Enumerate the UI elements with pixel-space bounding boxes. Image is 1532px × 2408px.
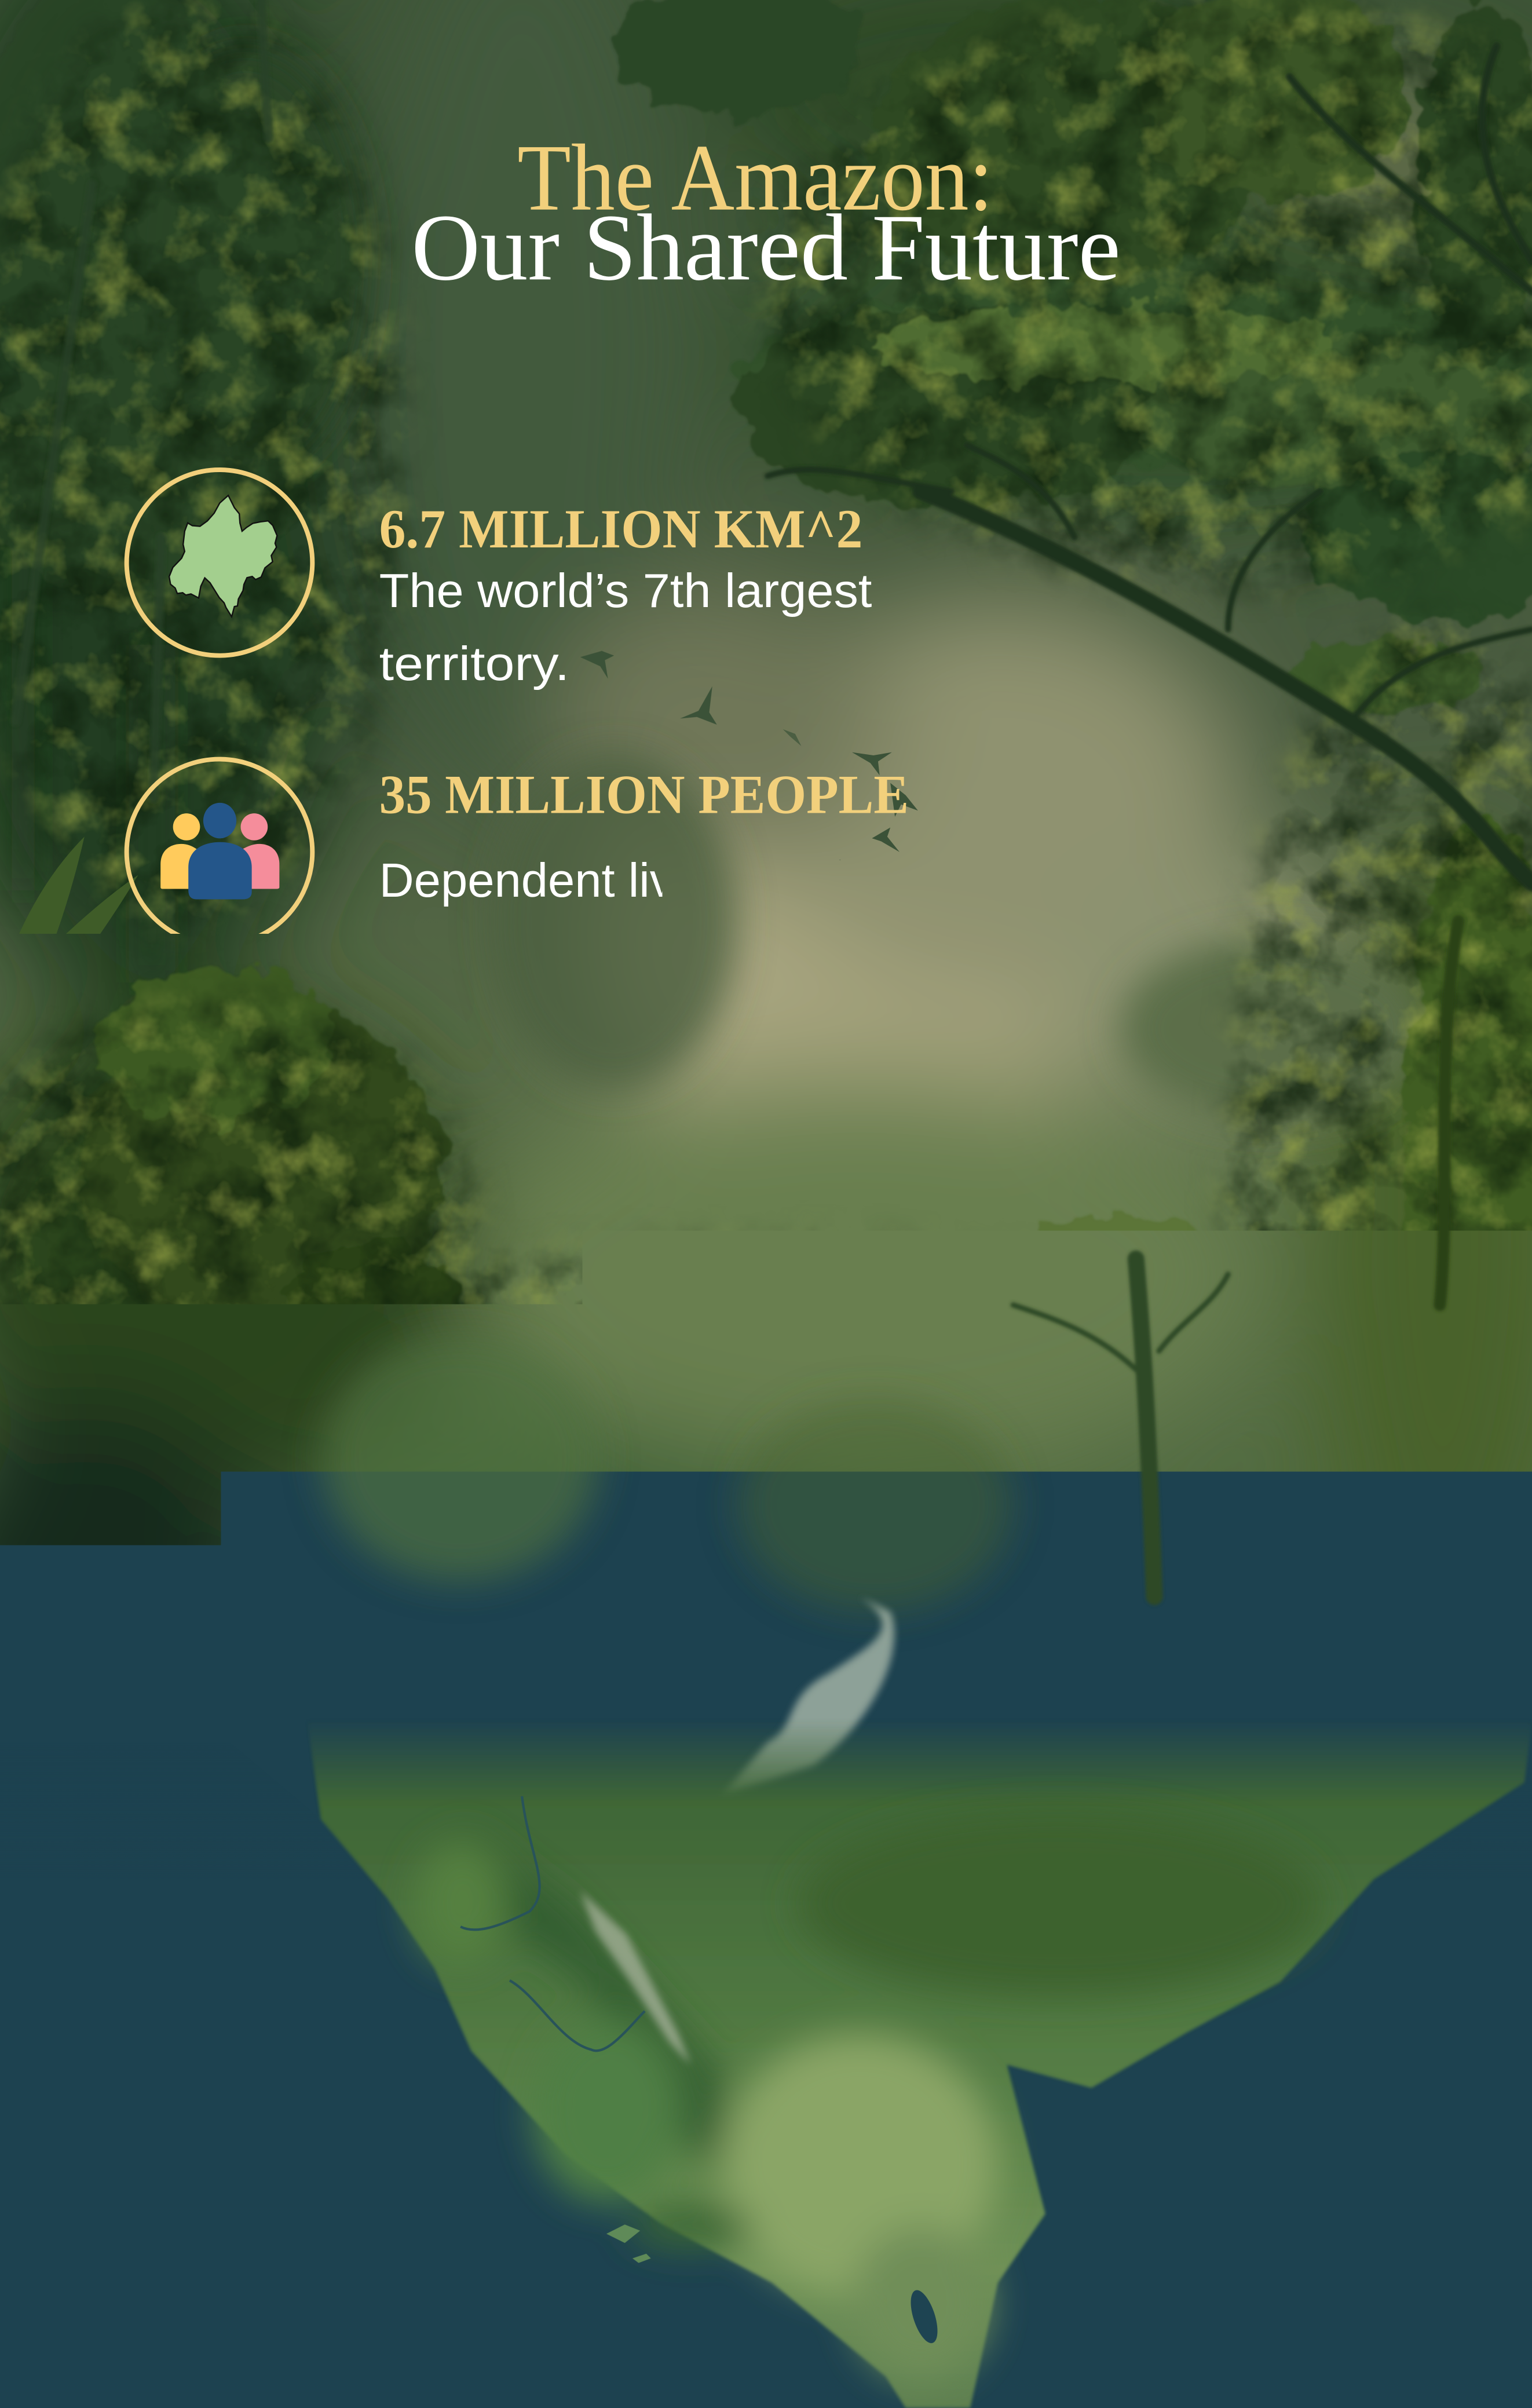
heading: California equivalent: 1/10th [706, 1976, 952, 2081]
stat heading: 6.7 MILLION KM^2 [379, 498, 862, 560]
icon: CO2 with leaves: CO [571, 1168, 680, 1259]
icon: Amazon territory map [127, 470, 312, 656]
heading: California equivalent: California [1081, 1976, 1447, 2081]
ocean [0, 1735, 1532, 2408]
stat description: than most nations. [379, 927, 772, 980]
carbon subscript: 2 [1475, 1165, 1500, 1198]
heading: California equivalent: the equivalent of [763, 1906, 1402, 2012]
stat description: territory. [379, 638, 569, 690]
left dark tree [0, 0, 353, 599]
stat description: Dependent lives, greater [379, 854, 904, 907]
stat description: innovation. [812, 1576, 1044, 1628]
stat description: emissions. [812, 1299, 1032, 1352]
panel: species stat [555, 1385, 1397, 1628]
stat heading: 35 MILLION PEOPLE [379, 763, 909, 825]
map of California land [307, 1719, 1532, 2408]
stat description [379, 854, 904, 980]
tree branches and trunks [16, 0, 1532, 1596]
title: Our Shared Future [411, 195, 1121, 300]
stat description [812, 1226, 1336, 1352]
right canopy foliage [77, 0, 1532, 1827]
stat description: The world’s 7th largest [379, 565, 872, 617]
heading: protecting area: We are Protecting [103, 1693, 727, 1785]
panel: people stat [127, 759, 909, 980]
icon: CO2 with leaves: 2 [686, 1199, 717, 1249]
distant canopy silhouettes [19, 46, 1428, 1612]
title [411, 125, 1121, 300]
title: The Amazon: [517, 125, 993, 231]
icon: CO2 with leaves [555, 1121, 741, 1307]
stat description: Fueling medical & cosmetic [812, 1504, 1397, 1556]
panel: carbon stat [555, 1121, 1500, 1352]
river [722, 1596, 894, 1796]
stat heading: 200 BILLION TONNES CO [812, 1135, 1472, 1197]
heading: protecting area [103, 1693, 727, 1856]
heading: protecting area: 40,000 KM^2 [178, 1774, 609, 1856]
stat heading: 3,000+ SPECIES [812, 1412, 1244, 1474]
map label: California: California [479, 1924, 622, 1960]
closing call to action: Stand with the Amazon [476, 2281, 1162, 2362]
heading: California equivalent: of [979, 1976, 1064, 2081]
stat description: Storing 5 years of global [812, 1226, 1336, 1278]
heading: California equivalent [706, 1906, 1447, 2081]
icon: group of people [127, 759, 312, 945]
arrow pointing to California [330, 1982, 591, 2147]
birds [580, 651, 918, 1004]
stat description [812, 1504, 1397, 1628]
stat description [379, 565, 872, 690]
bromeliad plants [0, 836, 295, 1850]
panel: territory stat [127, 470, 872, 690]
icon: biodiversity globe [555, 1385, 741, 1571]
